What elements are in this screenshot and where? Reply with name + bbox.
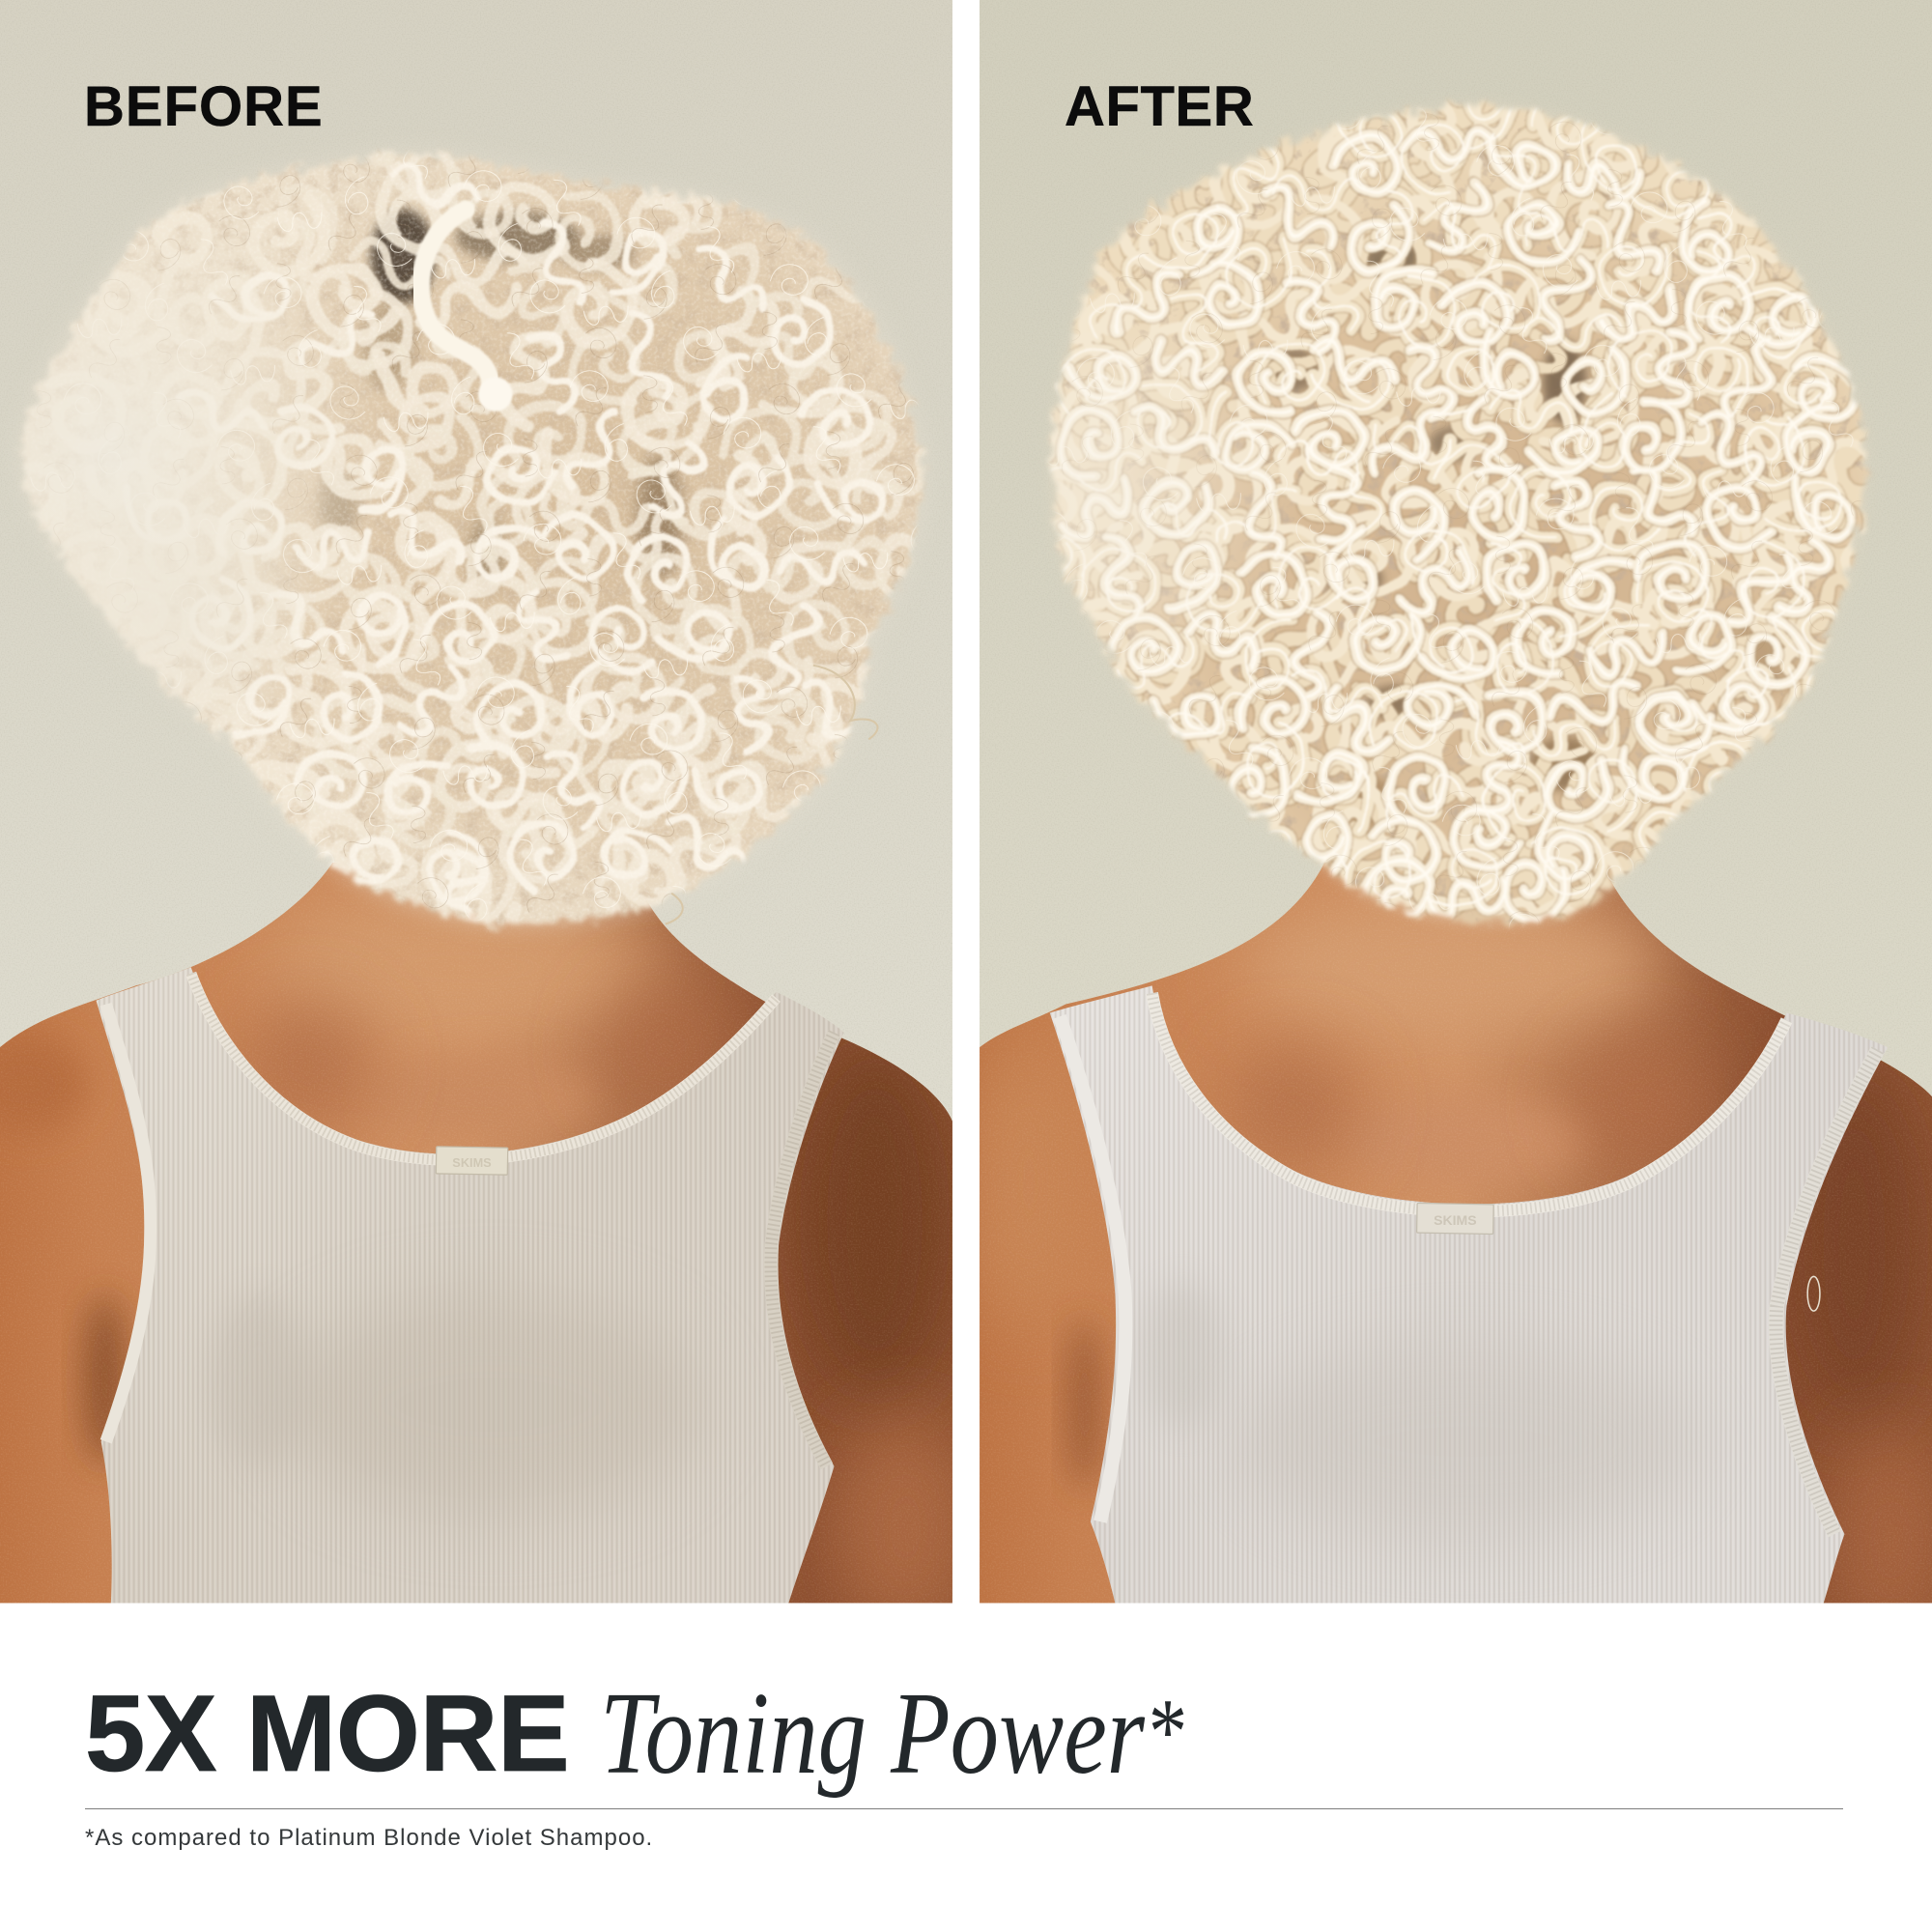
after backdrop xyxy=(980,0,1932,1603)
before neck label xyxy=(436,1147,508,1175)
before hair xyxy=(17,149,927,936)
after hair xyxy=(818,0,1932,1160)
footnote: *As compared to Platinum Blonde Violet Shampoo. xyxy=(85,1825,653,1851)
headline: 5X MORE xyxy=(85,1673,569,1794)
label: before: BEFORE xyxy=(84,75,324,138)
after neck label xyxy=(1417,1203,1493,1234)
label: after: AFTER xyxy=(1065,75,1254,138)
stray hair loop xyxy=(1807,1276,1820,1311)
stray curl wisps xyxy=(666,666,877,924)
rule xyxy=(85,1808,1843,1809)
after ribbed tank top xyxy=(1050,985,1888,1603)
before ribbed tank top xyxy=(96,967,844,1603)
headline: Toning Power* xyxy=(600,1668,1183,1799)
after neck label: SKIMS xyxy=(1434,1212,1477,1228)
headline xyxy=(85,1668,1184,1799)
after back and shoulders xyxy=(967,850,1932,1651)
before neck label: SKIMS xyxy=(452,1155,492,1170)
before backdrop xyxy=(0,0,952,1121)
panel: before photo xyxy=(0,0,952,1604)
before back and shoulders xyxy=(0,850,980,1638)
panel: after photo xyxy=(980,0,1932,1604)
